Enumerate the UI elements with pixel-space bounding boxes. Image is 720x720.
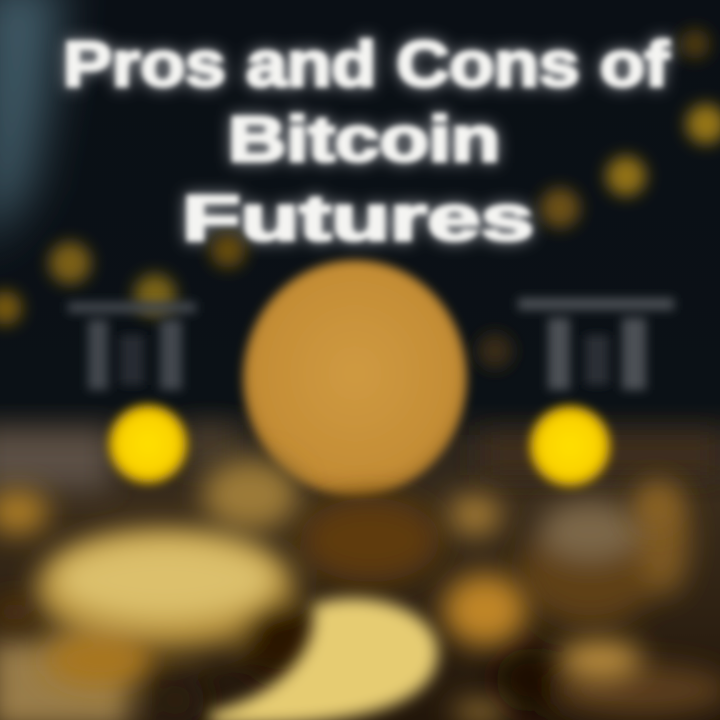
gold coin: bottom (452, 702, 508, 720)
coin: right (606, 156, 646, 196)
gold coin: right stack (443, 574, 527, 646)
right column: cons list (518, 298, 674, 390)
coin: beneath title (210, 232, 246, 268)
left yellow bright coin (108, 404, 188, 484)
coin: above left column (134, 274, 176, 316)
right yellow bright coin (529, 405, 611, 487)
title line 1: Pros and Cons of (63, 28, 670, 100)
floating gold coins (0, 29, 720, 369)
coin: near center right (477, 333, 513, 369)
coin: top right (680, 29, 710, 59)
title (63, 28, 670, 254)
gold coin: left pile (53, 538, 277, 622)
coin: under title (540, 188, 580, 228)
title glow: Pros and Cons of (63, 28, 670, 100)
gold coin: far right (635, 483, 675, 527)
gold coin: left edge (0, 490, 48, 534)
table glow (0, 425, 720, 490)
gold coin: left stack (202, 459, 298, 531)
gold coin: bottom left (45, 634, 155, 686)
title line 2: Bitcoin (228, 103, 500, 175)
gold coin: center stack (449, 495, 501, 535)
title glow: Bitcoin (228, 103, 500, 175)
gold coin: front center (210, 598, 438, 720)
title glow: Futures (182, 182, 534, 254)
title line 3: Futures (182, 182, 534, 254)
foreground gold piles (0, 485, 720, 720)
light beam top left (0, 0, 62, 250)
left column: pros list (68, 302, 196, 390)
gold coin: bottom right (558, 640, 642, 680)
coin: left edge (0, 291, 22, 325)
coin: left (49, 242, 91, 284)
dark gap (0, 600, 35, 624)
coin: right edge (686, 104, 720, 144)
main gold coin (243, 260, 467, 496)
title glow (63, 28, 670, 254)
